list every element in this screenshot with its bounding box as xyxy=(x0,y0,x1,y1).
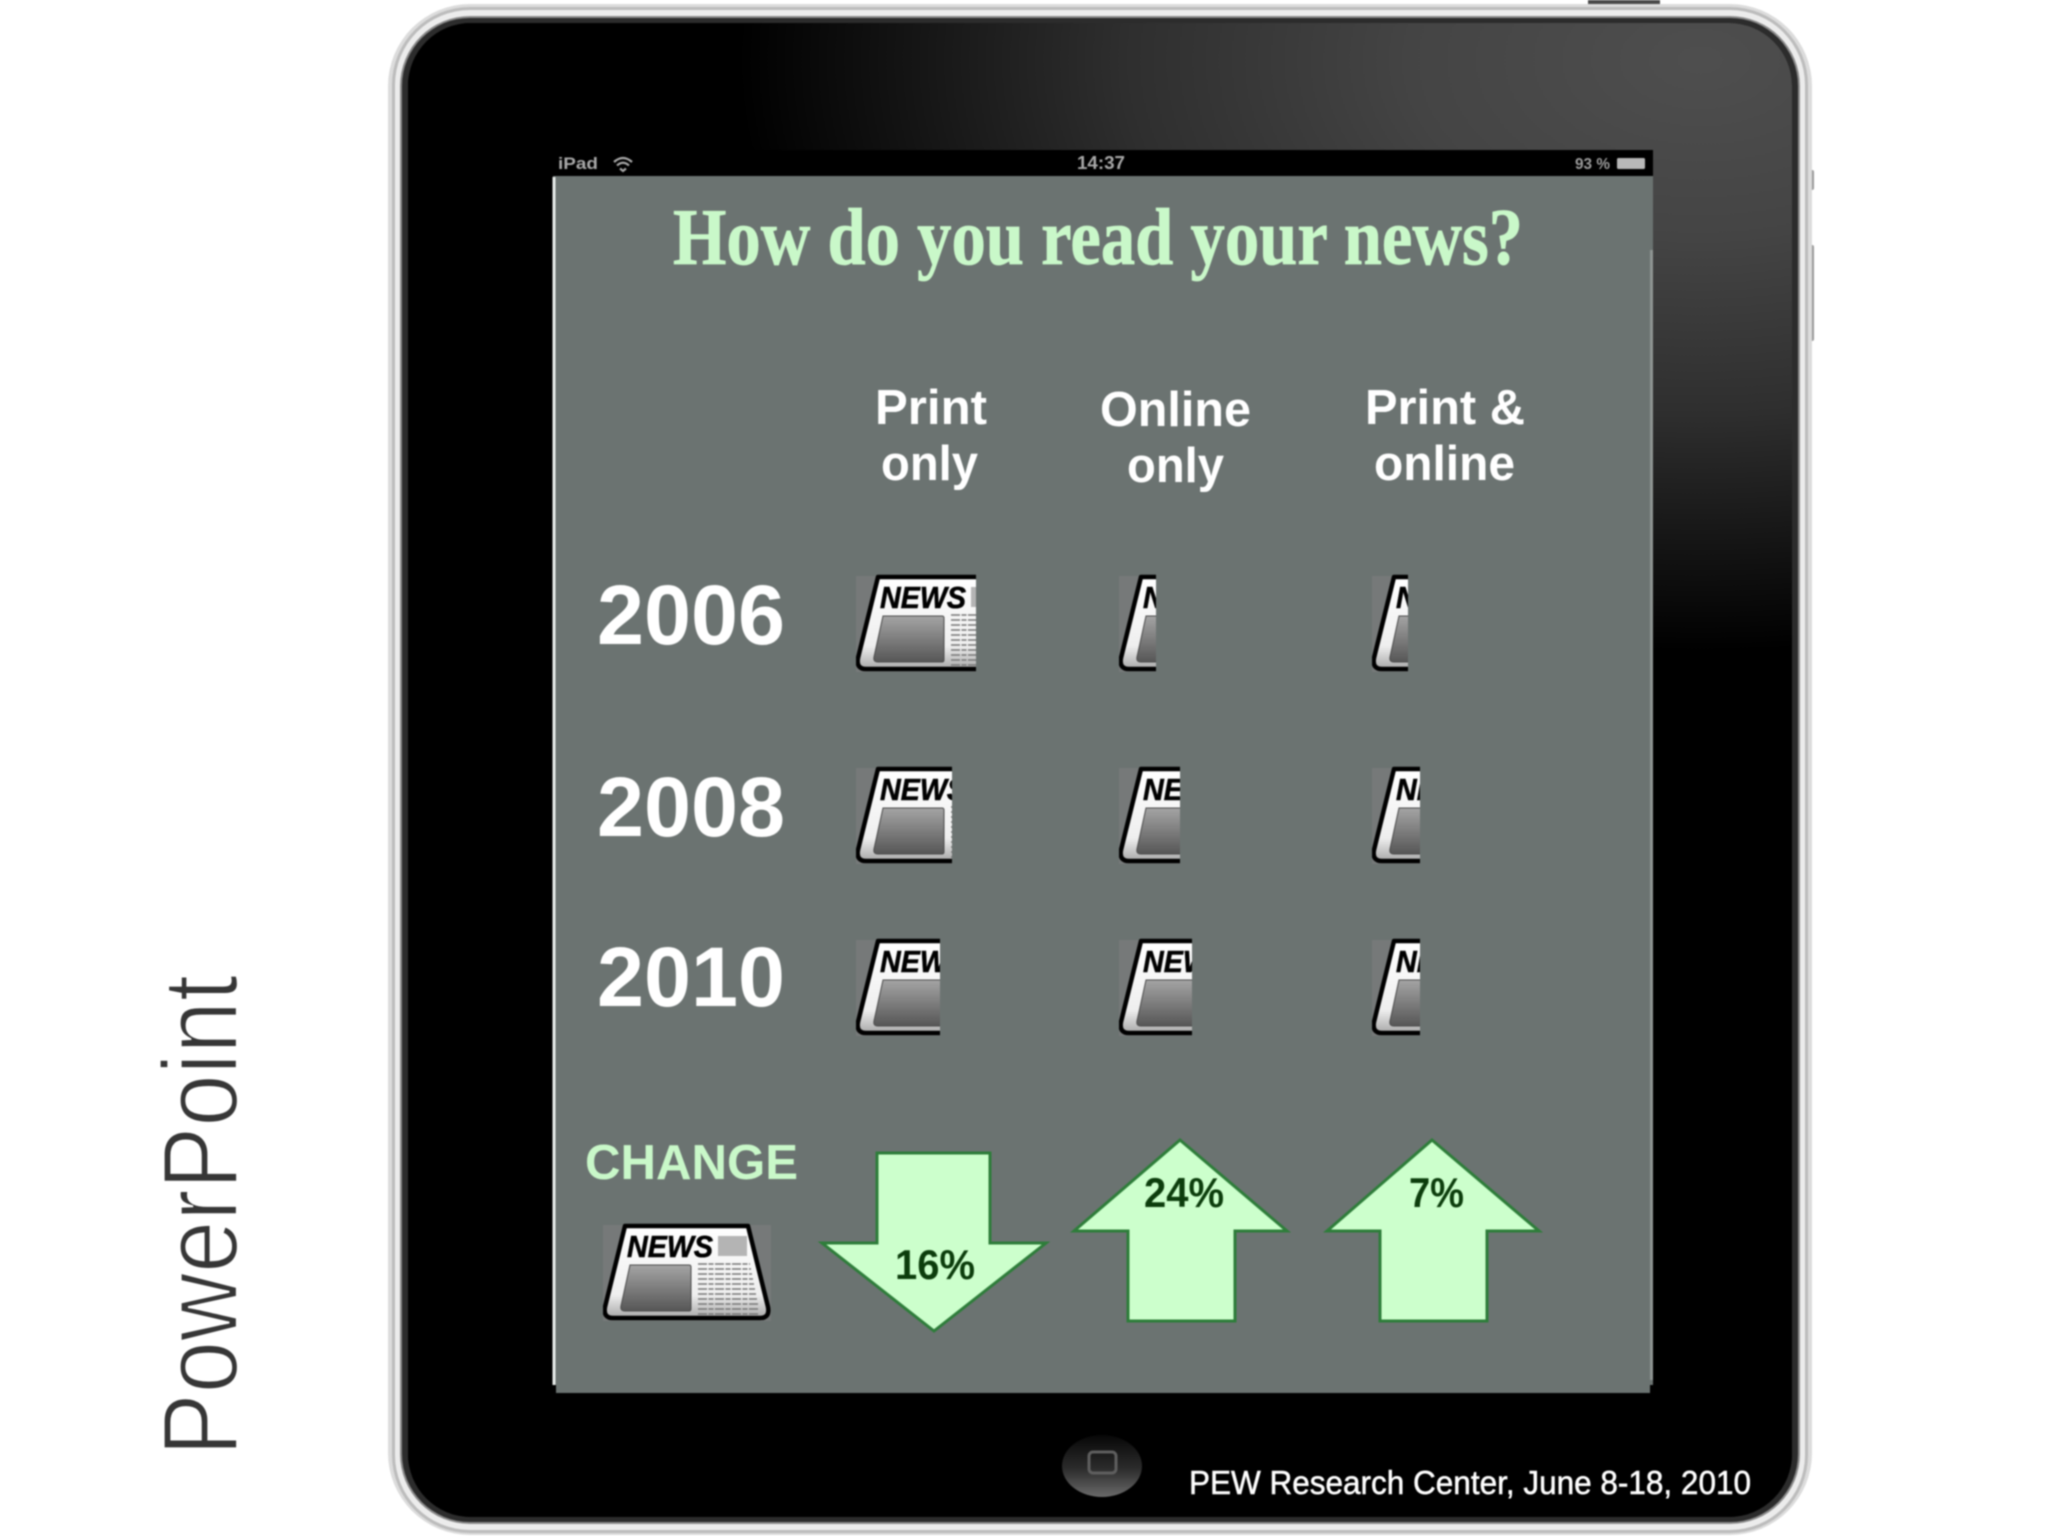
column heading: Online only: Online xyxy=(1100,383,1251,437)
source credit: PEW Research Center, June 8-18, 2010 xyxy=(1189,1464,1751,1501)
panel: status bar xyxy=(553,150,1653,177)
icon: newspaper 2008 online only xyxy=(1118,766,1229,864)
arrow: print and online up 7% xyxy=(1327,1140,1539,1321)
panel: tablet device frame xyxy=(388,0,1814,1535)
column heading: Online only: only xyxy=(1127,439,1224,493)
title: How do you read your news? xyxy=(673,192,1523,282)
label: PowerPoint vertical text: PowerPoint xyxy=(140,975,260,1456)
text: clock: 14:37 xyxy=(1077,153,1125,173)
arrow: online only up 24%: 24% xyxy=(1144,1169,1224,1216)
icon: volume rocker xyxy=(1808,245,1814,341)
icon: power button xyxy=(1588,0,1660,5)
icon: newspaper 2006 print only: NEWS xyxy=(880,580,966,615)
icon: newspaper 2010 print and online: NEWS xyxy=(1396,944,1482,979)
icon: newspaper 2006 online only xyxy=(1118,574,1229,672)
row label: 2010: 2010 xyxy=(597,930,785,1024)
icon: newspaper change legend xyxy=(602,1222,772,1322)
icon: newspaper 2008 print only: NEWS xyxy=(880,772,966,807)
column heading: Online only xyxy=(1100,383,1251,493)
icon: newspaper 2006 print and online: NEWS xyxy=(1396,580,1482,615)
column heading: Print only: Print xyxy=(875,381,987,435)
text: battery percent: 93 % xyxy=(1575,156,1610,173)
icon: home button xyxy=(1062,1435,1142,1497)
icon: newspaper 2010 online only: NEWS xyxy=(1143,944,1229,979)
icon: wifi xyxy=(614,158,632,171)
icon: newspaper 2010 print and online xyxy=(1371,938,1482,1036)
arrow: online only up 24% xyxy=(1074,1140,1287,1321)
icon: newspaper 2006 print and online xyxy=(1371,574,1482,672)
icon: newspaper change legend: NEWS xyxy=(627,1229,713,1264)
column heading: Print only xyxy=(875,381,987,491)
arrow: print and online up 7%: 7% xyxy=(1409,1169,1464,1216)
arrow: print only down 16% xyxy=(822,1153,1046,1331)
icon: newspaper 2008 print and online xyxy=(1371,766,1482,864)
column heading: Print and online xyxy=(1365,381,1525,491)
icon: newspaper 2010 online only xyxy=(1118,938,1229,1036)
column heading: Print only: only xyxy=(881,437,978,491)
icon: newspaper 2006 online only: NEWS xyxy=(1143,580,1229,615)
icon: newspaper 2008 print only xyxy=(855,766,966,864)
panel: slide screen xyxy=(552,176,1653,1393)
column heading: Print and online: Print & xyxy=(1365,381,1525,435)
icon: newspaper 2010 print only xyxy=(855,938,966,1036)
column heading: Print and online: online xyxy=(1374,437,1515,491)
icon: newspaper 2008 print and online: NEWS xyxy=(1396,772,1482,807)
icon: newspaper 2006 print only xyxy=(855,574,977,672)
text: device name: iPad xyxy=(558,154,598,173)
icon: side switch xyxy=(1808,170,1814,190)
icon: battery xyxy=(1617,158,1645,169)
row label: 2008: 2008 xyxy=(597,760,785,854)
icon: newspaper 2010 print only: NEWS xyxy=(880,944,966,979)
arrow: print only down 16%: 16% xyxy=(895,1241,975,1288)
heading: CHANGE: CHANGE xyxy=(585,1136,798,1190)
icon: newspaper 2008 online only: NEWS xyxy=(1143,772,1229,807)
row label: 2006: 2006 xyxy=(597,568,785,662)
